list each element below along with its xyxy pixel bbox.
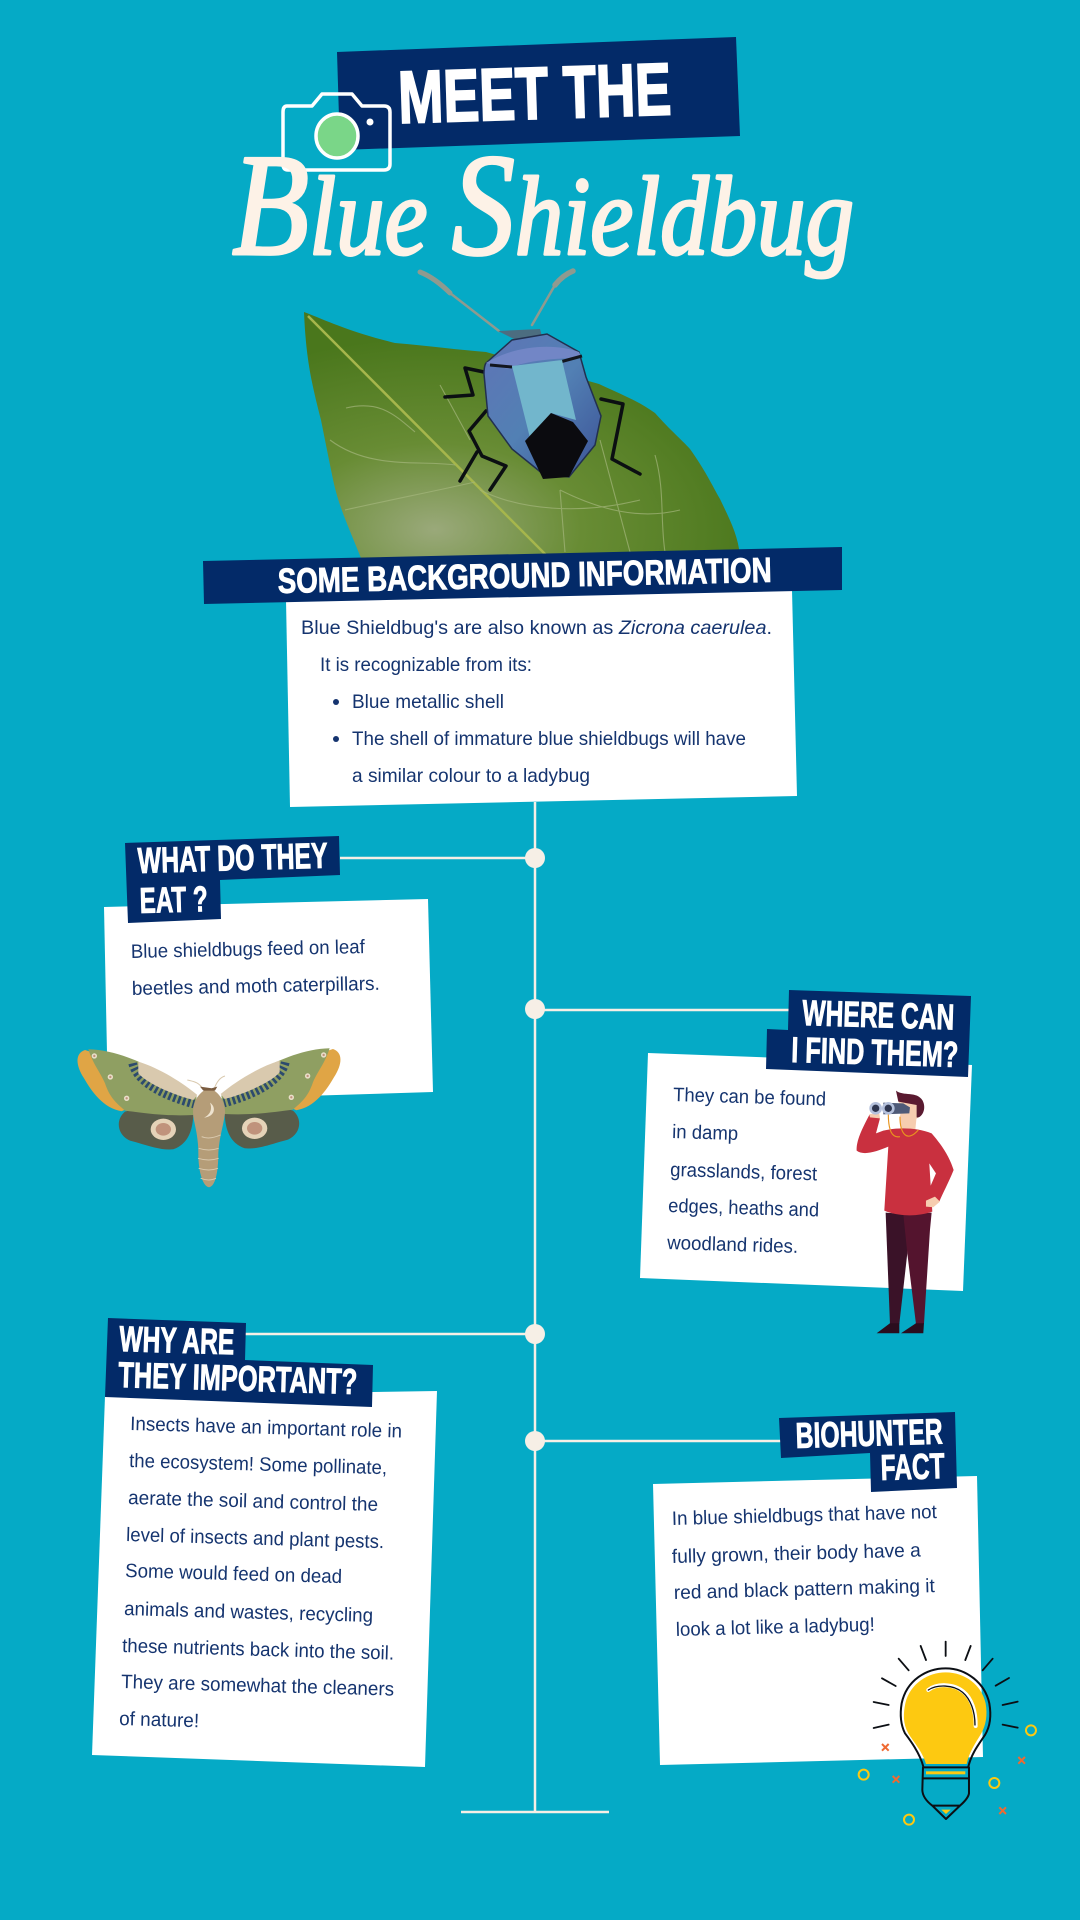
photo: leaf with blue shieldbug	[304, 271, 740, 568]
text: diet copy: Blue shieldbugs feed on leaf	[131, 936, 366, 963]
heading: what do they eat	[125, 835, 340, 923]
heading: some background information: SOME BACKGROUND INFORMATION	[277, 551, 772, 601]
bug body	[484, 329, 601, 479]
text: importance copy: Some would feed on dead	[125, 1560, 342, 1588]
text: importance copy: the ecosystem! Some pollinate,	[129, 1450, 387, 1479]
icon: camera	[283, 94, 390, 170]
heading: why are they important: THEY IMPORTANT?	[118, 1354, 358, 1402]
icon: light bulb	[859, 1642, 1036, 1825]
text: diet copy	[131, 936, 380, 1000]
text: importance copy: aerate the soil and control the	[128, 1487, 378, 1516]
text: habitat copy: grasslands, forest	[670, 1159, 818, 1185]
heading: what do they eat: WHAT DO THEY	[137, 835, 328, 881]
heading: biohunter fact: BIOHUNTER	[795, 1411, 943, 1456]
text: importance copy	[119, 1413, 402, 1732]
panel: where can I find them	[640, 990, 972, 1291]
title banner: Meet the	[337, 37, 740, 150]
icon: person with binoculars	[857, 1091, 954, 1333]
text: habitat copy: edges, heaths and	[668, 1195, 819, 1221]
heading: biohunter fact: FACT	[880, 1445, 945, 1488]
text: background copy: a similar colour to a ladybug	[352, 765, 590, 787]
panel: what do they eat	[104, 835, 433, 1102]
heading: what do they eat: EAT ?	[139, 878, 208, 921]
leaf	[304, 312, 740, 568]
text: importance copy: Insects have an important role in	[130, 1413, 402, 1443]
timeline connector	[245, 802, 790, 1812]
text: habitat copy: woodland rides.	[666, 1232, 798, 1258]
text: diet copy: beetles and moth caterpillars.	[132, 973, 380, 1000]
text: background copy: It is recognizable from its:	[320, 654, 532, 676]
text: fact copy: look a lot like a ladybug!	[676, 1614, 875, 1641]
panel: biohunter fact	[653, 1411, 983, 1765]
heading: why are they important: WHY ARE	[119, 1318, 235, 1362]
text: importance copy: of nature!	[119, 1708, 199, 1732]
heading: where can I find them: WHERE CAN	[802, 992, 955, 1038]
text: background copy: Blue Shieldbug's are also known as Zicrona caerulea.	[301, 617, 772, 639]
heading: where can I find them: I FIND THEM?	[791, 1029, 959, 1075]
text: fact copy: red and black pattern making it	[674, 1575, 936, 1604]
bug legs	[445, 368, 640, 490]
text: importance copy: level of insects and plant pests.	[126, 1524, 384, 1553]
text: importance copy: They are somewhat the cleaners	[121, 1671, 395, 1701]
panel: background information	[203, 547, 842, 807]
text: background copy: Blue metallic shell	[352, 691, 504, 713]
text: fact copy: In blue shieldbugs that have not	[672, 1501, 938, 1530]
title banner: Meet the: MEET THE	[397, 47, 672, 139]
text: importance copy: these nutrients back into the soil.	[122, 1635, 394, 1665]
text: habitat copy	[666, 1084, 826, 1258]
text: fact copy	[672, 1501, 938, 1641]
icon: moth	[77, 1048, 340, 1187]
bug antennae	[420, 271, 573, 331]
text: background copy	[301, 617, 772, 787]
text: background copy: The shell of immature blue shieldbugs will have	[352, 728, 746, 750]
panel: why are they important	[92, 1318, 437, 1767]
heading: where can I find them	[766, 990, 971, 1077]
heading: why are they important	[105, 1318, 373, 1407]
text: importance copy: animals and wastes, recycling	[124, 1598, 373, 1627]
text: habitat copy: They can be found	[673, 1084, 826, 1111]
text: fact copy: fully grown, their body have a	[672, 1539, 921, 1568]
heading: biohunter fact	[779, 1411, 957, 1492]
title: Blue Shieldbug: Blue Shieldbug	[232, 124, 854, 286]
text: habitat copy: in damp	[672, 1121, 739, 1145]
